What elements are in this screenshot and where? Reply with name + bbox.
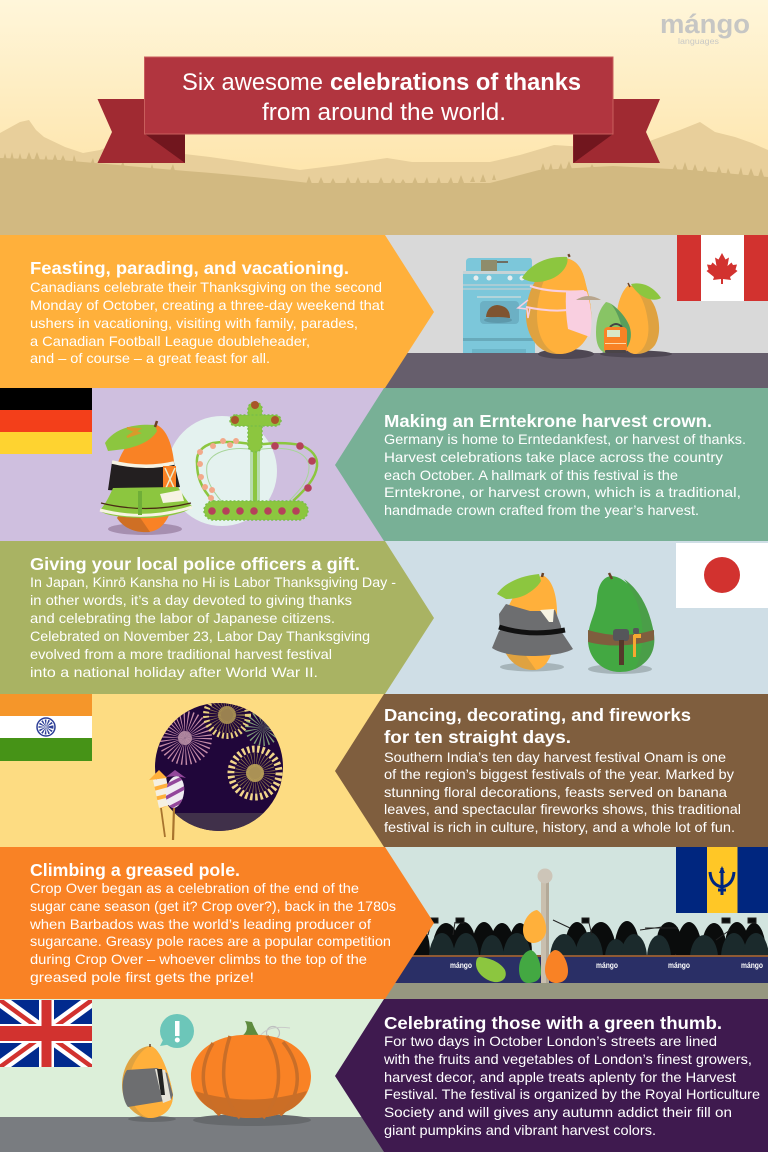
text: Barbados body: Crop Over began as a celebration of the end of the <box>30 881 359 896</box>
text: Japan body: In Japan, Kinrō Kansha no Hi is Labor Thanksgiving Day - <box>30 575 396 590</box>
text: Japan body: and celebrating the labor of Japanese citizens. <box>30 611 335 626</box>
text: Germany body: Germany is home to Erntedankfest, or harvest of thanks. <box>384 432 746 447</box>
heading: Dancing: Dancing, decorating, and fireworks <box>384 705 691 725</box>
heading: Erntekrone: Making an Erntekrone harvest crown. <box>384 411 712 431</box>
panel: United Kingdom <box>0 999 768 1152</box>
text: India body <box>384 750 741 835</box>
text: UK body: giant pumpkins and vibrant harvest colors. <box>384 1123 656 1138</box>
icon: UK flag <box>0 1000 92 1067</box>
icon: avocado with tool belt <box>588 573 654 674</box>
text: Canada body: Canadians celebrate their Thanksgiving on the second <box>30 280 382 295</box>
icon: Japanese flag <box>676 543 768 608</box>
text: UK body: Society and will gives any autumn addict their fill on <box>384 1105 732 1120</box>
icon: pumpkin <box>191 1021 311 1126</box>
text: Germany body <box>384 432 746 518</box>
text: Japan body: Celebrated on November 23, Labor Day Thanksgiving <box>30 629 370 644</box>
icon: mango in grey kimono <box>492 573 573 672</box>
heading: Feasting: Feasting, parading, and vacationing. <box>30 258 349 278</box>
text: UK body: Festival. The festival is organized by the Royal Horticulture <box>384 1087 760 1102</box>
logo: mango languages: languages <box>678 37 719 46</box>
icon: mangos on the pole <box>476 910 568 983</box>
text: Canada body: a Canadian Football League doubleheader, <box>30 334 310 349</box>
text: Canada body: and – of course – a great feast for all. <box>30 351 270 366</box>
text: Barbados body: during Crop Over – whoever climbs to the top of the <box>30 952 367 967</box>
heading: Dancing <box>384 705 691 747</box>
panel: Japan <box>0 541 768 694</box>
icon: mango in suit <box>122 1044 176 1122</box>
text: Barbados body: greased pole first gets the prize! <box>30 970 254 985</box>
logo: mango languages: mángo <box>660 9 750 39</box>
text: Japan body: in other words, it’s a day devoted to giving thanks <box>30 593 352 608</box>
icon: fireworks circle <box>155 703 283 831</box>
heading: police gift: Giving your local police officers a gift. <box>30 554 360 574</box>
text: Germany body: handmade crown crafted from the year’s harvest. <box>384 503 699 518</box>
heading: Dancing: for ten straight days. <box>384 727 571 747</box>
text: Germany body: Harvest celebrations take place across the country <box>384 450 723 465</box>
panel: Barbados <box>0 847 768 999</box>
icon: Canadian flag <box>677 235 768 301</box>
icon: speech bubble with exclamation <box>160 1014 194 1048</box>
advertising banner: mángo <box>450 961 472 970</box>
panel: India <box>0 694 768 847</box>
title text: Six awesome <box>182 69 323 96</box>
crowd <box>413 921 768 955</box>
arrow panel: UK text background <box>335 999 768 1152</box>
title text: celebrations of thanks <box>330 69 581 96</box>
arrow panel: Japan text background <box>0 541 434 694</box>
text: Germany body: Erntekrone, or harvest crown, which is a traditional, <box>384 485 741 500</box>
crowd flags <box>428 918 756 940</box>
arrow panel: India text background <box>335 694 768 847</box>
text: Germany body: each October. A hallmark of this festival is the <box>384 468 678 483</box>
text: India body: leaves, and spectacular fireworks shows, this traditional <box>384 802 741 817</box>
text: Canada body <box>30 280 384 366</box>
text: India body: of the region’s biggest festivals of the year. Marked by <box>384 767 734 782</box>
text: Barbados body <box>29 881 396 985</box>
icon: small mango <box>617 283 661 354</box>
advertising banner: mángo <box>668 961 690 970</box>
text: UK body <box>383 1034 760 1138</box>
icon: stove <box>463 258 535 353</box>
arrow panel: Germany text background <box>335 388 768 541</box>
text: UK body: harvest decor, and apple treats aplenty for the Harvest <box>384 1070 736 1085</box>
icon: avocado with backpack <box>596 302 631 353</box>
title text <box>182 69 581 126</box>
heading: greased pole: Climbing a greased pole. <box>30 860 240 880</box>
text: Japan body <box>30 575 396 680</box>
icon: orange mango in dirndl <box>100 421 192 535</box>
title text: from around the world. <box>262 99 506 126</box>
text: UK body: with the fruits and vegetables of London’s finest growers, <box>383 1052 752 1067</box>
text: Canada body: ushers in vacationing, visiting with family, parades, <box>30 316 358 331</box>
icon: greased pole <box>538 868 552 983</box>
arrow panel: Canada text background <box>0 235 434 388</box>
advertising banner <box>384 957 768 983</box>
panel: Canada <box>0 235 768 388</box>
icon: rockets <box>149 770 188 840</box>
icon: harvest crown <box>197 401 317 520</box>
text: Barbados body: sugarcane. Greasy pole races are a popular competition <box>30 934 391 949</box>
text: India body: stunning floral decorations, feasts served on banana <box>384 785 727 800</box>
advertising banner: mángo <box>741 961 763 970</box>
text: Barbados body: sugar cane season (get it? Crop over?), back in the 1780s <box>30 899 396 914</box>
icon: Barbados flag <box>676 847 768 913</box>
text: India body: festival is rich in culture, history, and a whole lot of fun. <box>384 820 735 835</box>
text: Barbados body: when Barbados was the world’s leading producer of <box>29 917 371 932</box>
icon: large mango with apron <box>518 255 601 354</box>
header: landscape background <box>0 0 768 236</box>
panel: Germany <box>0 388 768 541</box>
icon: German flag <box>0 388 92 454</box>
icon: Indian flag <box>0 694 92 761</box>
title ribbon <box>98 57 660 163</box>
advertising banner: mángo <box>596 961 618 970</box>
heading: green thumb: Celebrating those with a green thumb. <box>384 1013 722 1033</box>
text: UK body: For two days in October London’s streets are lined <box>384 1034 717 1049</box>
text: India body: Southern India’s ten day harvest festival Onam is one <box>384 750 726 765</box>
text: Japan body: evolved from a more traditional harvest festival <box>30 647 332 662</box>
arrow panel: Barbados text background <box>0 847 434 999</box>
text: Canada body: Monday of October, creating a three-day weekend that <box>30 298 384 313</box>
text: Japan body: into a national holiday after World War II. <box>30 665 318 680</box>
